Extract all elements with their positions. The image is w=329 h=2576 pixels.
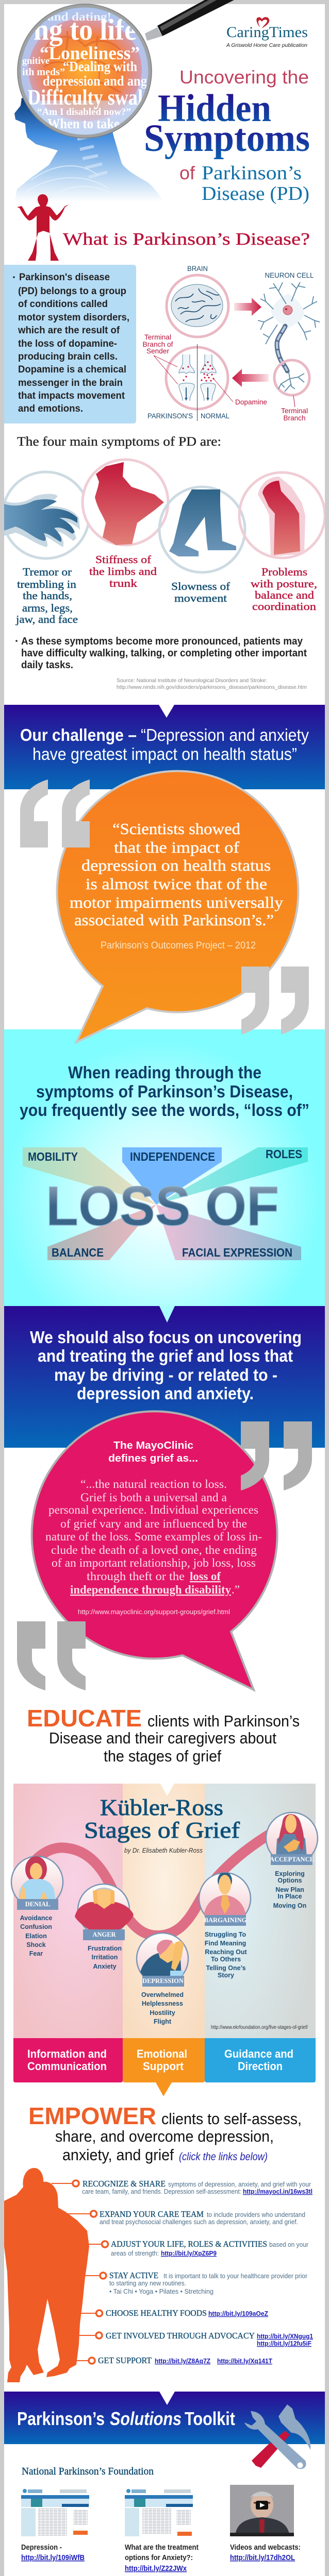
text block: progression: daily tasks. xyxy=(21,659,73,671)
speech bubble: scientists quote: Parkinson’s Outcomes Project – 2012 xyxy=(101,940,256,951)
quote text: that the impact of xyxy=(114,838,240,856)
resource: NPF videos: http://bit.ly/17dh2OL xyxy=(230,2553,295,2562)
stage: bargaining: Struggling To xyxy=(205,1931,246,1938)
list: stay active: STAY ACTIVE xyxy=(109,2270,158,2280)
synapse comparison: PARKINSON'S xyxy=(147,412,193,420)
list: get support xyxy=(75,2355,272,2365)
text block: progression: As these symptoms become more pronounced, patients may xyxy=(21,636,303,647)
symptom: posture: balance and xyxy=(255,589,315,601)
icon: magnifier handle xyxy=(145,0,234,41)
heading: empower: (click the links below) xyxy=(179,2151,268,2163)
symptom: posture: coordination xyxy=(252,600,317,613)
panel: definition of PD: (PD) belongs to a group xyxy=(18,286,126,297)
stage: bargaining: Story xyxy=(218,1972,234,1979)
panel: definition of PD: Parkinson's disease xyxy=(19,272,110,283)
logo: Caring Times xyxy=(226,17,308,48)
heading: you frequently see the words, “loss of” xyxy=(20,1100,309,1120)
brain in lens: depression and ang xyxy=(43,73,147,89)
panel: definition of PD: which are the result of xyxy=(18,325,120,336)
ray: roles: ROLES xyxy=(266,1147,302,1161)
band: our challenge: “Depression and anxiety xyxy=(141,725,309,744)
ray: facial expression: FACIAL EXPRESSION xyxy=(182,1246,292,1259)
neuron cell: NEURON CELL xyxy=(265,271,314,279)
title: Uncovering the xyxy=(179,66,309,88)
quote text xyxy=(70,820,284,929)
brain in lens: “Dealing with xyxy=(63,59,137,74)
brain: BRAIN xyxy=(187,264,208,273)
stage: bargaining: Telling One’s xyxy=(206,1964,246,1972)
stage: denial: Fear xyxy=(29,1950,43,1957)
heading: empower xyxy=(28,2103,302,2164)
heading: symptoms of Parkinson’s Disease, xyxy=(36,1082,293,1101)
band: grief and loss: depression and anxiety. xyxy=(77,1384,254,1403)
stage: bargaining: Reaching Out xyxy=(205,1948,247,1956)
source note xyxy=(117,677,307,690)
box: guidance and direction xyxy=(205,2038,316,2082)
magnifying glass xyxy=(15,0,234,142)
bubble quote: clude the death of a loved one, the ending xyxy=(51,1544,257,1556)
text block: progression: have difficulty walking, talking, or completing other important xyxy=(21,648,307,659)
heading: What is Parkinson's Disease?: What is Parkinson’s Disease? xyxy=(63,230,310,249)
icon: hammer and wrench xyxy=(244,2404,310,2469)
panel: definition of PD xyxy=(4,265,136,423)
symptom: tremor: trembling in xyxy=(17,578,77,590)
axon xyxy=(277,326,287,371)
symptom: slowness: Slowness of xyxy=(171,580,230,592)
head and spine x-ray figure xyxy=(14,98,163,202)
symptom: tremor xyxy=(3,472,89,625)
thumbnail xyxy=(125,2485,193,2536)
box: information and communication: Information and xyxy=(27,2047,107,2060)
terminal branch: Branch xyxy=(284,414,305,422)
box: guidance and direction: Direction xyxy=(238,2060,283,2073)
list: choose healthy foods: http://bit.ly/109aOeZ xyxy=(208,2310,268,2317)
heading: educate: EDUCATE xyxy=(27,1705,142,1732)
panel title xyxy=(84,1795,240,1854)
ray: balance xyxy=(47,1205,156,1260)
resource: NPF videos xyxy=(230,2485,301,2562)
list: recognize and share: RECOGNIZE & SHARE xyxy=(83,2179,166,2189)
list: recognize and share: symptoms of depression, anxiety, and grief with your xyxy=(168,2181,311,2188)
brain in lens: gnitive xyxy=(22,56,50,66)
band: our challenge: Our challenge – xyxy=(20,725,137,744)
speech bubble: mayo clinic definition: http://www.mayoclinic.org/support-groups/grief.html xyxy=(78,1608,230,1616)
band: grief and loss: and treating the grief and loss that xyxy=(38,1346,293,1365)
arrow: terminal to synapse xyxy=(232,369,269,387)
brain in lens: ith meds” xyxy=(22,66,65,78)
panel: definition of PD: of conditions called xyxy=(18,299,108,310)
symptom: posture: with posture, xyxy=(251,578,317,590)
ray: independence xyxy=(122,1147,222,1205)
stage: depression: Helplessness xyxy=(142,2000,183,2007)
list: get involved through advocacy xyxy=(78,2331,313,2347)
stage: acceptance: ACCEPTANCE xyxy=(270,1856,314,1863)
icon: heart xyxy=(256,17,269,28)
heading: empower: clients to self-assess, xyxy=(161,2110,302,2128)
heading: educate: clients with Parkinson’s xyxy=(147,1712,300,1730)
symptom: slowness: movement xyxy=(174,592,227,604)
panel: definition of PD: motor system disorders, xyxy=(18,312,129,323)
thumbnail xyxy=(21,2485,89,2536)
symptom: slowness xyxy=(159,487,245,604)
list: get support: http://bit.ly/Xq141T xyxy=(217,2358,272,2365)
synapse comparison xyxy=(142,333,267,421)
box: emotional support: Support xyxy=(143,2060,184,2073)
stage: denial: DENIAL xyxy=(25,1901,50,1908)
bubble quote: Grief is both a universal and a xyxy=(80,1491,227,1504)
text block: progression xyxy=(15,636,307,671)
band: solutions toolkit xyxy=(4,2392,325,2444)
stage: denial: Confusion xyxy=(20,1923,52,1930)
list: recognize and share xyxy=(52,2179,312,2195)
title: Disease (PD) xyxy=(202,183,309,205)
heading: empower: anxiety, and grief xyxy=(62,2146,174,2164)
resource: NPF anxiety xyxy=(125,2485,199,2573)
brain in lens xyxy=(21,7,149,135)
resource: NPF depression: http://bit.ly/109iWfB xyxy=(21,2553,85,2562)
brain in lens: Difficulty swal xyxy=(27,86,143,110)
bubble quote: of an important relationship, job loss, loss xyxy=(52,1556,256,1569)
brain in lens: When to take xyxy=(47,116,120,131)
list: recognize and share: care team, family, and friends. Depression self-assessment: xyxy=(82,2188,241,2195)
band: our challenge: have greatest impact on health status” xyxy=(32,744,297,764)
logo: Caring Times: CaringTimes xyxy=(226,24,308,41)
stage: acceptance: Moving On xyxy=(273,1902,306,1909)
icon: couple silhouette xyxy=(4,2168,89,2382)
quote text: is almost twice that of the xyxy=(86,875,267,893)
list: expand your care team: and treat psychosocial challenges such as depression, anxiety, and grief. xyxy=(100,2218,298,2226)
panel title: Stages of Grief xyxy=(84,1818,240,1843)
icon: opening quote marks grey xyxy=(17,1621,86,1690)
panel title: Kübler-Ross xyxy=(100,1795,223,1820)
box: information and communication: Communication xyxy=(27,2060,107,2073)
quote text: depression on health status xyxy=(81,856,271,874)
stage: denial: Avoidance xyxy=(20,1914,52,1922)
band: grief and loss: We should also focus on uncovering xyxy=(30,1328,302,1347)
bubble quote: .” xyxy=(232,1583,240,1596)
title: of xyxy=(179,162,195,183)
heading: educate: Disease and their caregivers about xyxy=(49,1729,276,1747)
list: adjust your life xyxy=(88,2239,308,2257)
ray: mobility xyxy=(23,1147,156,1205)
icon: opening quote marks xyxy=(20,779,90,848)
quote text: motor impairments universally xyxy=(70,893,284,911)
stage: depression: Hostility xyxy=(150,2009,175,2016)
list: stay active: • Tai Chi • Yoga • Pilates • Stretching xyxy=(109,2288,213,2295)
source note: Source: National Institute of Neurological Disorders and Stroke: xyxy=(117,677,267,684)
box: emotional support: Emotional xyxy=(137,2047,187,2060)
brain in lens: “Am I disabled now?” xyxy=(37,107,131,117)
stage: acceptance xyxy=(266,1812,318,1909)
grief curve xyxy=(31,1829,278,1936)
stage: bargaining: To Others xyxy=(211,1956,241,1963)
stage: acceptance: In Place xyxy=(277,1893,302,1900)
stage: denial: Elation xyxy=(25,1933,47,1940)
quote text: “Scientists showed xyxy=(112,820,241,838)
source url: http://www.ekrfoundation.org/five-stages-of-grief/ xyxy=(211,2025,308,2030)
symptom: tremor: Tremor or xyxy=(23,566,72,578)
logo: Caring Times: A Griswold Home Care publication xyxy=(226,42,307,48)
diagram: brain neuron dopamine xyxy=(142,264,320,422)
stage: bargaining: Find Meaning xyxy=(205,1940,246,1947)
source note: http://www.ninds.nih.gov/disorders/parkinsons_disease/parkinsons_disease.htm xyxy=(117,684,307,690)
title: Symptoms xyxy=(144,117,310,160)
title: Hidden xyxy=(158,87,271,130)
list: stay active: to starting any new routines. xyxy=(109,2280,186,2287)
resource: NPF depression: Depression - xyxy=(21,2543,62,2552)
heading xyxy=(20,1063,309,1120)
synapse comparison: Sender xyxy=(146,347,169,355)
bubble heading: The MayoClinic xyxy=(113,1440,193,1451)
ray: mobility: MOBILITY xyxy=(28,1150,78,1163)
panel: definition of PD: messenger in the brain xyxy=(18,378,123,388)
heading: When reading through the xyxy=(68,1063,261,1082)
bubble quote: loss of xyxy=(190,1570,221,1583)
synapse comparison: NORMAL xyxy=(201,412,229,420)
symptom: tremor: arms, legs, xyxy=(22,602,73,614)
band: solutions toolkit: Parkinson’s xyxy=(17,2408,105,2429)
symptom: stiffness: Stiffness of xyxy=(95,553,151,566)
symptom: tremor: the hands, xyxy=(23,589,72,602)
bubble quote: personal experience. Individual experiences xyxy=(48,1503,258,1516)
band: grief and loss xyxy=(4,1306,325,1448)
panel title: by Dr. Elisabeth Kubler-Ross xyxy=(124,1846,203,1854)
stage: anger: Frustration xyxy=(88,1945,122,1952)
stage: depression: Flight xyxy=(154,2018,172,2025)
symptom: stiffness: the limbs and xyxy=(89,565,157,578)
brain in lens: ng to life xyxy=(34,13,137,46)
stage: anger xyxy=(75,1884,134,1970)
stage: depression: DEPRESSION xyxy=(142,1977,184,1985)
stage: denial xyxy=(11,1856,63,1957)
brain xyxy=(167,264,228,337)
stage: depression xyxy=(137,1933,188,2025)
heading: four main symptoms: The four main symptoms of PD are: xyxy=(17,435,221,449)
bubble quote: “...the natural reaction to loss. xyxy=(80,1478,227,1490)
list: get involved through advocacy: http://bit.ly/12fu5iF xyxy=(257,2340,311,2347)
stage: acceptance: Options xyxy=(277,1877,302,1884)
heading: educate: the stages of grief xyxy=(104,1747,221,1765)
speech bubble: scientists quote xyxy=(57,771,298,1042)
list: stay active: It is important to talk to your healthcare provider prior xyxy=(163,2273,307,2280)
list: get support: http://bit.ly/Z8Aq7Z xyxy=(155,2358,210,2365)
stage: acceptance: Exploring xyxy=(275,1870,305,1877)
box: emotional support xyxy=(123,2038,205,2096)
terminal branch xyxy=(274,360,309,422)
panel: cyan loss of xyxy=(4,1029,325,1306)
list: adjust your life: http://bit.ly/XpZ6P9 xyxy=(161,2250,217,2257)
panel: definition of PD: that impacts movement xyxy=(18,391,125,401)
list: expand your care team: EXPAND YOUR CARE TEAM xyxy=(100,2209,204,2219)
icon: closing quote marks xyxy=(241,967,309,1035)
ray: facial expression xyxy=(156,1205,301,1260)
bubble heading xyxy=(108,1440,198,1464)
panel: definition of PD: Dopamine is a chemical xyxy=(18,364,126,375)
heading: empower: EMPOWER xyxy=(28,2103,156,2129)
terminal branch: Terminal xyxy=(281,406,308,415)
band: solutions toolkit: Solutions xyxy=(110,2408,182,2429)
list: get support: GET SUPPORT xyxy=(98,2355,152,2365)
symptom: tremor: jaw, and face xyxy=(15,613,78,625)
resource: NPF videos: Videos and webcasts: xyxy=(230,2543,301,2552)
box: information and communication xyxy=(13,2038,123,2082)
heading: empower: share, and overcome depression, xyxy=(55,2127,274,2145)
synapse comparison: Dopamine xyxy=(235,398,267,406)
bubble quote: independence through disability xyxy=(70,1583,231,1596)
ray: independence: INDEPENDENCE xyxy=(130,1150,215,1163)
stage: anger: Irritation xyxy=(92,1954,118,1961)
list: stay active xyxy=(85,2270,307,2295)
title xyxy=(144,66,310,205)
heading: national parkinson's foundation: National Parkinson’s Foundation xyxy=(22,2466,154,2477)
band: grief and loss: may be driving - or related to - xyxy=(54,1365,277,1384)
panel: definition of PD: the loss of dopamine- xyxy=(18,338,117,349)
stage: denial: Shock xyxy=(26,1941,46,1948)
resource: NPF anxiety: What are the treatment xyxy=(125,2543,199,2552)
symptom: posture xyxy=(239,472,325,613)
brain in lens: “Loneliness” xyxy=(40,43,140,63)
band: our challenge xyxy=(4,705,325,789)
box: guidance and direction: Guidance and xyxy=(224,2047,293,2060)
stage: anger: Anxiety xyxy=(93,1963,117,1970)
icon: shrugging person xyxy=(17,194,69,261)
synapse comparison: Branch of xyxy=(142,340,173,348)
stage: anger: ANGER xyxy=(92,1931,117,1938)
list: choose healthy foods xyxy=(78,2308,268,2318)
list: get involved through advocacy: http://bit.ly/XNgug1 xyxy=(257,2333,313,2340)
panel: definition of PD: producing brain cells. xyxy=(18,351,118,362)
synapse comparison: Terminal xyxy=(144,333,171,341)
symptom: stiffness xyxy=(83,460,168,589)
panel: definition of PD: and emotions. xyxy=(18,403,83,414)
ray: balance: BALANCE xyxy=(52,1246,104,1259)
bubble quote: nature of the loss. Some examples of loss in- xyxy=(45,1530,262,1543)
bubble quote: of grief vary and are influenced by the xyxy=(60,1517,247,1530)
panel: Kubler-Ross stages of grief xyxy=(11,1784,318,2038)
stage: bargaining xyxy=(199,1872,251,1979)
symptom: stiffness: trunk xyxy=(109,577,138,589)
neuron cell xyxy=(258,271,320,344)
bubble quote: through theft or the xyxy=(87,1570,185,1583)
band: solutions toolkit: Toolkit xyxy=(185,2408,235,2429)
speech bubble: mayo clinic definition xyxy=(32,1411,277,1690)
list: choose healthy foods: CHOOSE HEALTHY FOODS xyxy=(106,2308,207,2318)
ray: roles xyxy=(156,1147,308,1205)
stage: acceptance: New Plan xyxy=(275,1886,304,1893)
LOSS OF wordmark: LOSS OF xyxy=(46,1175,279,1237)
list: get involved through advocacy: GET INVOLVED THROUGH ADVOCACY xyxy=(106,2331,255,2341)
heading: educate xyxy=(27,1705,300,1765)
stage: depression: Overwhelmed xyxy=(141,1991,184,1998)
symptom: posture: Problems xyxy=(261,566,307,578)
icon: closing quote marks grey xyxy=(241,1421,312,1490)
video thumbnail xyxy=(230,2485,294,2536)
resource: NPF anxiety: options for Anxiety?: xyxy=(125,2553,193,2562)
title: Parkinson’s xyxy=(202,162,302,184)
resource: NPF anxiety: http://bit.ly/Z22JWx xyxy=(125,2564,187,2573)
quote text: associated with Parkinson’s.” xyxy=(74,911,274,929)
arrow: brain to neuron xyxy=(234,298,261,316)
list: expand your care team xyxy=(67,2209,305,2226)
list: adjust your life: areas of strength: xyxy=(111,2250,159,2257)
stage: bargaining: BARGAINING xyxy=(204,1917,247,1924)
list: expand your care team: to include providers who understand xyxy=(207,2211,305,2218)
list: adjust your life: ADJUST YOUR LIFE, ROLES & ACTIVITIES xyxy=(111,2239,267,2249)
brain in lens: and dating! xyxy=(47,10,111,23)
list: recognize and share: http://mayocl.in/16ws3tl xyxy=(243,2188,312,2195)
resource: NPF depression xyxy=(21,2485,89,2562)
bubble heading: defines grief as... xyxy=(108,1453,198,1464)
bubble quote xyxy=(45,1478,262,1596)
list: adjust your life: based on your xyxy=(269,2241,308,2248)
